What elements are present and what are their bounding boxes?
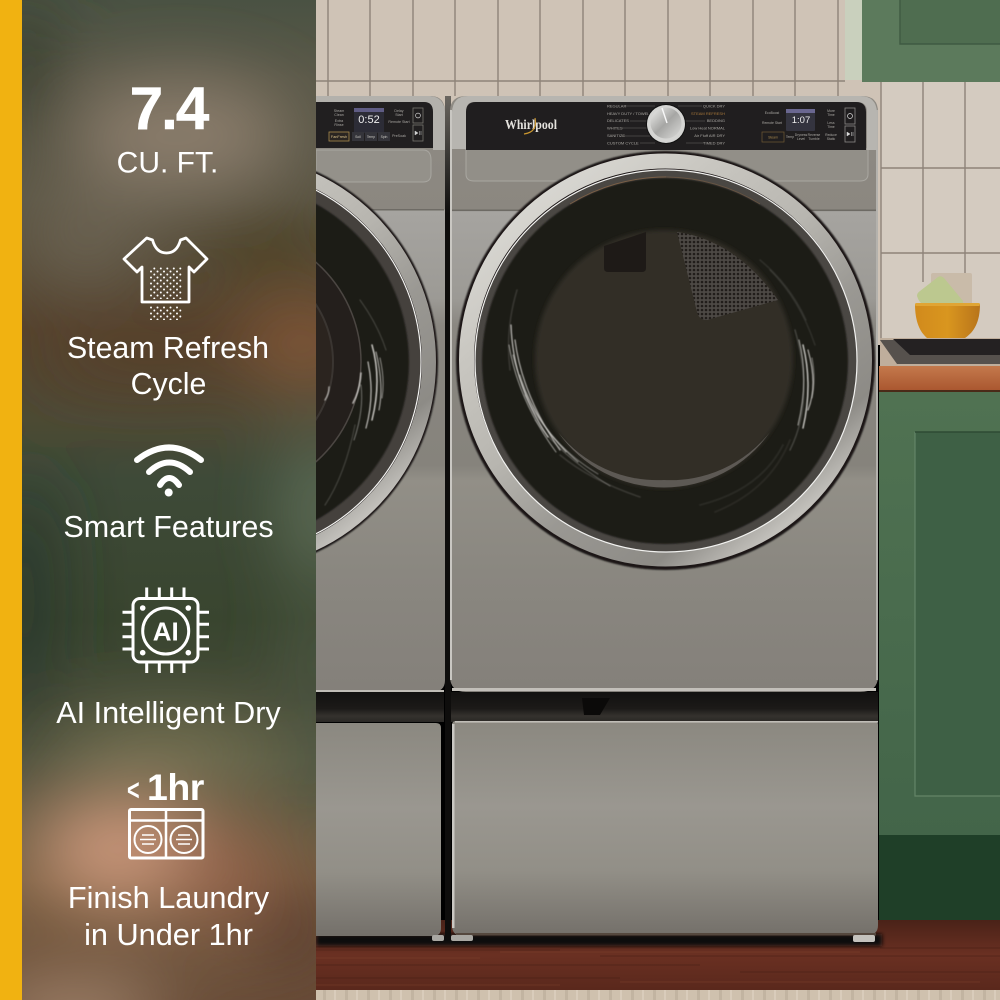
dryer control panel: STEAM REFRESH	[691, 111, 725, 116]
lower cabinet	[879, 392, 1000, 921]
door shadow	[456, 151, 875, 570]
sponge and bowl	[915, 273, 980, 338]
drum back	[535, 230, 793, 488]
left washer control panel: 0:52	[358, 114, 380, 126]
dryer control panel: BEDDING	[707, 118, 725, 123]
dryer control panel	[452, 96, 877, 150]
power and start buttons	[845, 108, 855, 142]
cycle dial	[646, 104, 686, 144]
left washer control panel: Clean	[334, 113, 344, 117]
dryer control panel: 1:07	[792, 115, 810, 126]
left washer control panel: Remote Start	[388, 120, 410, 124]
left washer control panel: Extra	[335, 119, 343, 123]
option labels	[762, 109, 837, 141]
icon: AI chip	[122, 588, 209, 673]
dryer control panel: Low Heat NORMAL	[690, 126, 726, 130]
option labels: Time	[827, 125, 835, 129]
cycle labels: CUSTOM CYCLE	[607, 140, 639, 146]
dryer pedestal	[451, 692, 878, 942]
label: AI Intelligent Dry: AI Intelligent Dry	[56, 696, 281, 730]
label: Smart Features: Smart Features	[63, 510, 274, 544]
option labels: Reverse	[808, 133, 820, 137]
option labels: Level	[797, 137, 805, 141]
icon: wifi	[137, 448, 201, 496]
option labels: Temp	[786, 135, 794, 139]
label: Steam Refresh Cycle: Steam Refresh	[67, 332, 269, 365]
cycle labels	[607, 104, 653, 146]
left washer control panel: Steam	[334, 109, 344, 113]
cycle labels: HEAVY DUTY / TOWELS	[607, 111, 653, 116]
option labels: Less	[827, 121, 835, 125]
label: Steam Refresh Cycle	[67, 332, 269, 401]
left washer control panel: Delay	[394, 109, 404, 113]
left washer control panel: Spin	[381, 135, 388, 139]
option labels: Dryness	[795, 133, 808, 137]
label: Finish Laundry in Under 1hr: Finish Laundry	[68, 880, 270, 915]
dryer control panel: Steam	[768, 136, 778, 140]
dryer control panel: TIMED DRY	[703, 140, 725, 146]
cycle labels: SANITIZE	[607, 133, 625, 138]
left pedestal	[316, 692, 444, 941]
drum vent mesh	[677, 232, 778, 320]
rug	[316, 990, 1000, 1000]
dryer control panel: Air Fluff AIR DRY	[694, 133, 725, 138]
left washer control panel: Temp	[367, 135, 375, 139]
label: Finish Laundry in Under 1hr: in Under 1hr	[84, 917, 253, 952]
left washer control panel: Rinse	[334, 123, 344, 127]
left washer door	[18, 152, 438, 572]
countertop and sink	[879, 338, 1000, 392]
cycle labels: REGULAR	[607, 104, 626, 108]
option labels: Static	[827, 137, 836, 141]
option labels: Time	[827, 113, 835, 117]
left washer body	[316, 96, 445, 692]
display	[786, 109, 815, 131]
left washer control panel: FanFresh	[331, 135, 347, 139]
yellow accent bar	[0, 0, 22, 1000]
dryer control panel: QUICK DRY	[703, 104, 725, 108]
option labels: Reduce	[825, 133, 837, 137]
brand logo: Whirlpool	[505, 117, 557, 132]
option labels: Tumble	[808, 137, 820, 141]
main dryer body	[450, 96, 878, 692]
drum lip	[558, 432, 770, 487]
capacity: 7.4 cu. ft.: CU. FT.	[117, 146, 218, 180]
chrome ring	[466, 161, 864, 559]
detergent drawer recess	[466, 149, 868, 181]
left washer control panel: PreSoak	[392, 134, 406, 138]
left washer control panel: Soil	[355, 135, 361, 139]
icon: under one hour text: 1hr	[147, 766, 205, 808]
left washer control panel	[316, 96, 445, 150]
upper cabinet	[845, 0, 1000, 82]
icon: AI chip: AI	[153, 616, 179, 646]
cycle labels: DELICATES	[607, 118, 629, 123]
tile wall background	[316, 0, 1000, 345]
lint filter box	[604, 232, 646, 272]
left washer control panel: Start	[395, 113, 403, 117]
option labels: More	[827, 109, 835, 113]
option labels: Remote Start	[762, 121, 782, 125]
capacity: 7.4 cu. ft.: 7.4	[130, 75, 210, 142]
option labels: EcoBoost	[765, 111, 779, 115]
icon: washer and dryer pair	[130, 810, 203, 858]
label: Steam Refresh Cycle: Cycle	[131, 368, 206, 401]
dark glass	[475, 170, 857, 552]
capacity: 7.4 cu. ft.	[117, 75, 218, 180]
icon: under one hour text: <	[127, 772, 140, 807]
icon: t-shirt with steam	[124, 238, 207, 320]
label: Finish Laundry in Under 1hr	[68, 880, 270, 952]
dryer door	[456, 151, 875, 570]
sidebar blurred background	[0, 0, 370, 1000]
wood floor	[316, 920, 1000, 990]
panel: feature sidebar	[22, 0, 316, 1000]
drum swirl strands	[509, 260, 815, 512]
gap between machines	[445, 96, 451, 938]
cycle labels: WHITES	[607, 126, 623, 130]
